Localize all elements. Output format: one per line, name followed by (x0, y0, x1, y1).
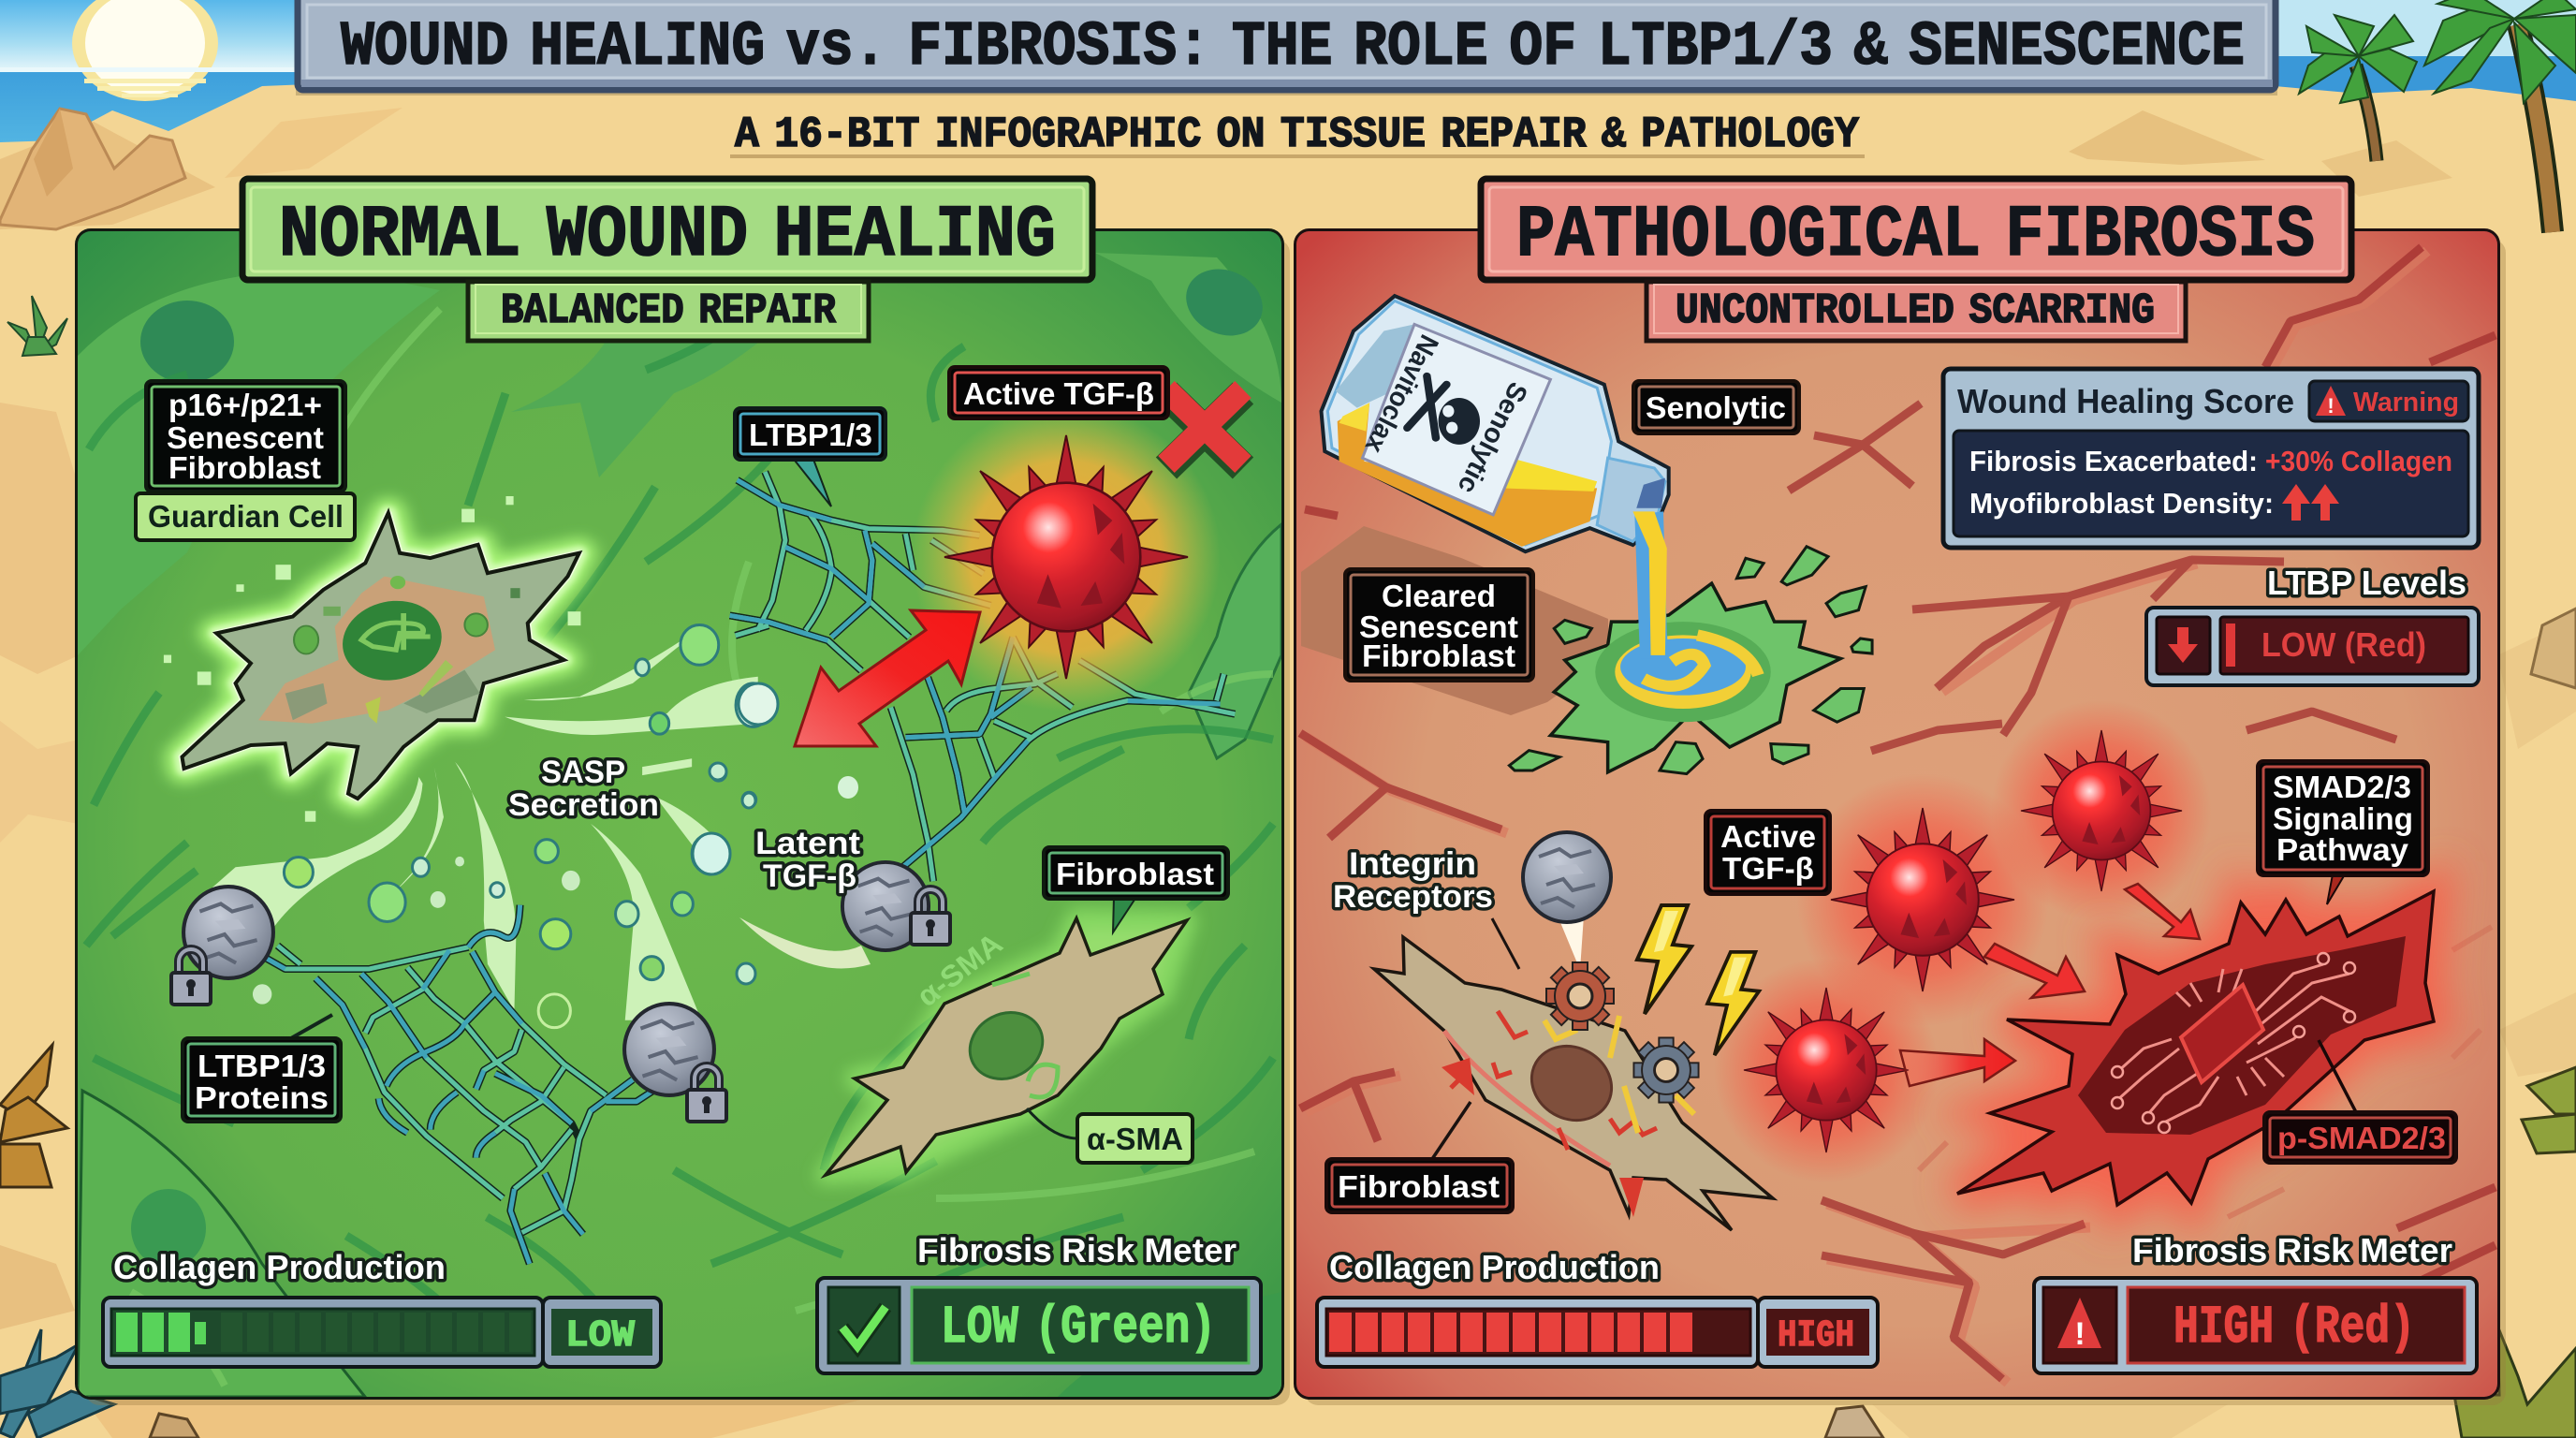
icon: navitoclax senolytic bottle: Navitoclax (1359, 330, 1443, 458)
web: LTBP1/3 lattice upper (730, 472, 1235, 881)
tissue lobes (78, 253, 1281, 1397)
label: active TGF-beta (949, 367, 1168, 418)
label: integrin receptors (1333, 846, 1519, 969)
label: cleared senescent fibroblast (1345, 569, 1533, 681)
icon: lightning bolts (1637, 905, 1759, 1055)
label: SMAD2/3 signaling pathway: Pathway (2276, 832, 2409, 867)
subtitle: A 16-BIT INFOGRAPHIC ON TISSUE REPAIR & PATHOLOGY (735, 110, 1859, 159)
label: guardian cell (136, 493, 355, 540)
label: LTBP1/3 proteins (183, 1015, 341, 1122)
label: LTBP1/3: LTBP1/3 (749, 418, 872, 452)
label: alpha-SMA: α-SMA (1087, 1122, 1183, 1156)
panel subtitle: uncontrolled scarring: UNCONTROLLED SCARRING (1676, 287, 2155, 335)
panel: wound healing score: +30% Collagen (2265, 445, 2452, 477)
icon: red X over active TGF-beta (1166, 389, 1243, 468)
tissue cracks (1300, 247, 2496, 1383)
icon: red double arrow (795, 610, 980, 746)
extra bubbles right of SASP (693, 683, 858, 984)
meter: fibrosis risk low: LOW (Green) (941, 1299, 1216, 1358)
panel: wound healing score (1943, 369, 2479, 548)
plants and rocks around the panels (0, 296, 2576, 1438)
label: fibroblast right: Fibroblast (1338, 1169, 1500, 1204)
shadow patch (1301, 526, 1608, 715)
label: senolytic (1633, 381, 1799, 433)
label: latent TGF-beta (755, 826, 860, 894)
fibroblast cell left (826, 918, 1187, 1175)
icon: active TGF-beta spiky ball (912, 403, 1221, 712)
icon: myofibroblast with circuit (1957, 891, 2434, 1205)
label: guardian cell: Guardian Cell (148, 499, 344, 534)
label: LTBP1/3 (735, 408, 886, 506)
main title banner (296, 0, 2277, 95)
label: alpha-SMA (1027, 1108, 1193, 1163)
panel: normal wound healing (78, 231, 1290, 1405)
label: cleared senescent fibroblast: Senescent (1359, 609, 1518, 644)
meter: fibrosis risk high (2034, 1231, 2477, 1373)
label: p-SMAD2/3 (2264, 1040, 2456, 1163)
label: active TGF-beta right: Active (1720, 819, 1816, 854)
label: fibroblast (1044, 847, 1228, 932)
label: SMAD2/3 signaling pathway: Signaling (2273, 801, 2413, 836)
label: p-SMAD2/3: p-SMAD2/3 (2277, 1121, 2446, 1155)
icon: red signal arrows (1900, 884, 2200, 1086)
web: LTBP1/3 lattice lower (260, 905, 655, 1264)
meter: collagen production high (1317, 1248, 1878, 1367)
label: SMAD2/3 signaling pathway: SMAD2/3 (2273, 770, 2411, 804)
meter: collagen production high: Collagen Production (1329, 1248, 1660, 1286)
panel subtitle: balanced repair: BALANCED REPAIR (501, 287, 836, 335)
fibroblast cell left: α-SMA (911, 926, 1008, 1013)
myofibroblast arrows (2282, 484, 2339, 521)
scene: sea and palm trees at top right (2265, 0, 2576, 232)
tissue fibres (86, 290, 1273, 1348)
label: senolytic: Senolytic (1646, 390, 1786, 425)
label: p16 senescent fibroblast: p16+/p21+ (168, 388, 322, 422)
label: SASP secretion: SASP (541, 755, 625, 790)
SASP secretion streams (212, 630, 758, 1020)
icon: navitoclax senolytic bottle: Senolytic (1452, 377, 1533, 498)
panel: wound healing score: Fibrosis Exacerbated: (1969, 445, 2258, 477)
label: SMAD2/3 signaling pathway (2258, 761, 2428, 904)
label: latent TGF-beta: TGF-β (763, 858, 856, 894)
label: p16 senescent fibroblast: Senescent (167, 420, 324, 455)
label: LTBP1/3 proteins: Proteins (195, 1080, 329, 1115)
icon: integrin ball with beam (1523, 832, 1611, 970)
meter: LTBP levels: LTBP Levels (2267, 564, 2466, 602)
fibroblast cell right (1374, 937, 1773, 1230)
panel: pathological fibrosis (1296, 231, 2506, 1405)
label: active TGF-beta right: TGF-β (1722, 851, 1814, 886)
label: SASP secretion (508, 755, 659, 823)
meter: fibrosis risk high: Fibrosis Risk Meter (2132, 1231, 2452, 1269)
latent stream wedge (739, 917, 871, 968)
label: SASP secretion: Secretion (508, 787, 659, 823)
panel title: normal wound healing: NORMAL WOUND HEALING (279, 195, 1056, 277)
meter: LTBP levels: LOW (Red) (2261, 625, 2426, 664)
guardian senescent cell (164, 496, 580, 822)
warning badge: ! (2327, 394, 2334, 418)
label: p16 senescent fibroblast: Fibroblast (168, 450, 321, 485)
scene: sun, sky and sea at top left (0, 0, 309, 229)
meter: fibrosis risk low: Fibrosis Risk Meter (917, 1231, 1237, 1269)
meter: collagen production low: LOW (565, 1315, 635, 1357)
panel: wound healing score: Myofibroblast Density: (1969, 487, 2274, 520)
label: integrin receptors: Integrin (1349, 846, 1476, 882)
icon: active TGF-beta spiky balls (1714, 700, 2212, 1182)
label: integrin receptors: Receptors (1333, 879, 1493, 915)
panel title: pathological fibrosis: PATHOLOGICAL FIBROSIS (1516, 195, 2315, 277)
meter: collagen production low: Collagen Production (113, 1248, 446, 1286)
label: p16 senescent fibroblast (146, 381, 345, 492)
label: cleared senescent fibroblast: Cleared (1382, 579, 1496, 613)
meter: LTBP levels (2146, 564, 2479, 685)
label: latent TGF-beta: Latent (755, 826, 860, 861)
label: LTBP1/3 proteins: LTBP1/3 (198, 1049, 326, 1083)
label: cleared senescent fibroblast: Fibroblast (1362, 638, 1515, 673)
warning badge: Warning (2353, 388, 2459, 418)
main title banner: WOUND HEALING vs. FIBROSIS: THE ROLE OF LTBP1/3 & SENESCENCE (341, 12, 2245, 83)
label: active TGF-beta: Active TGF-β (963, 376, 1154, 411)
label: active TGF-beta right (1705, 811, 1830, 894)
icon: navitoclax senolytic bottle (1321, 296, 1669, 658)
meter: fibrosis risk low (817, 1231, 1261, 1373)
label: fibroblast right (1326, 1102, 1513, 1212)
meter: collagen production high: HIGH (1778, 1315, 1854, 1357)
label: fibroblast: Fibroblast (1056, 857, 1214, 891)
meter: fibrosis risk high: HIGH (Red) (2174, 1299, 2415, 1358)
secretion bubbles (253, 624, 770, 1028)
score heading: Wound Healing Score (1957, 382, 2294, 420)
icon: latent TGF-beta balls with locks (171, 862, 950, 1122)
icon: integrin receptors gears (1546, 962, 1699, 1103)
warning badge (2309, 381, 2468, 421)
icon: cleared cell splatter (1509, 547, 1872, 774)
meter: collagen production low (103, 1248, 661, 1367)
meter: fibrosis risk high: ! (2074, 1316, 2086, 1352)
